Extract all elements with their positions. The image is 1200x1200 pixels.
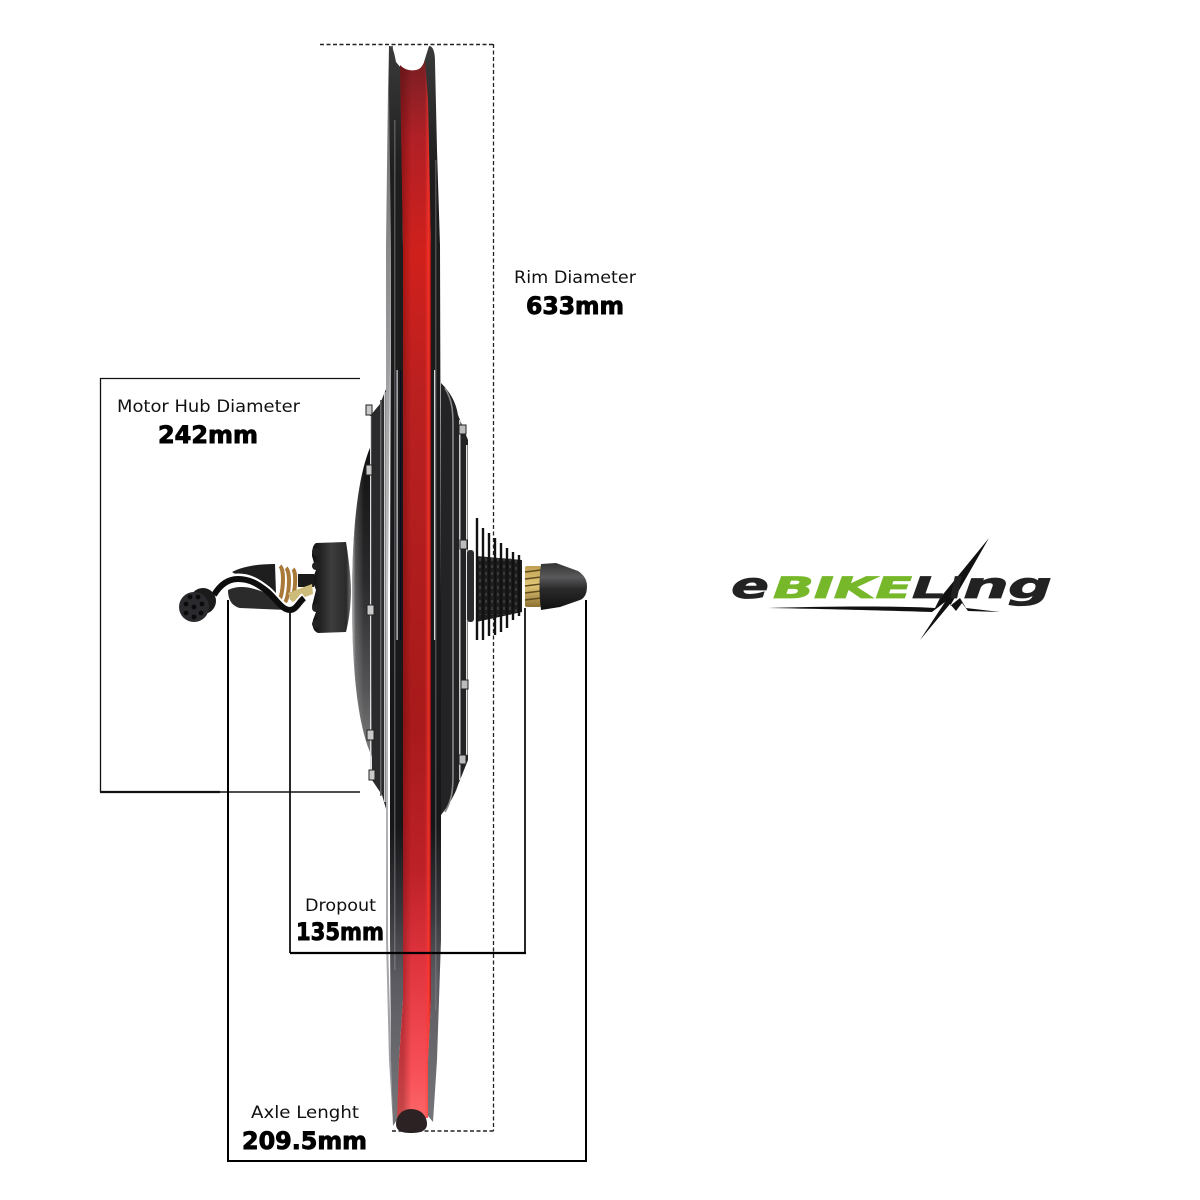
hub: motor dome	[352, 424, 388, 776]
dimension: motor hub diameter	[100, 378, 360, 792]
dimension: dropout	[290, 608, 526, 953]
logo wordmark: I	[950, 571, 962, 605]
wheel photo	[179, 46, 587, 1133]
logo wordmark: BIKE	[773, 571, 912, 605]
logo wordmark: n	[963, 566, 1009, 607]
8-pin connector	[179, 584, 220, 622]
dimension: rim diameter	[320, 44, 636, 1131]
axle nut	[540, 563, 587, 610]
label: dropout: Dropout	[305, 896, 376, 916]
hub: left flange	[366, 384, 388, 816]
label: motor hub diameter: Motor Hub Diameter	[117, 397, 300, 417]
label: rim diameter: Rim Diameter	[514, 268, 636, 288]
rim: red inner channel	[397, 60, 431, 1118]
cable moulding	[214, 564, 304, 610]
rim: outer bands	[386, 46, 441, 1126]
label: axle length: Axle Lenght	[251, 1103, 359, 1123]
hub: right flange	[441, 383, 468, 815]
value: 242mm: 242mm	[158, 421, 258, 449]
logo: ebikeling	[731, 538, 1052, 640]
logo wordmark: e	[731, 566, 769, 607]
left axle end cap	[312, 542, 351, 633]
value: 135mm: 135mm	[296, 918, 384, 946]
logo wordmark: L	[912, 571, 946, 605]
logo wordmark	[731, 566, 1052, 607]
value: 633mm: 633mm	[526, 292, 624, 320]
value: 209.5mm: 209.5mm	[242, 1127, 367, 1155]
dimension: axle length	[228, 600, 586, 1162]
cassette sprockets	[467, 518, 522, 640]
logo underline and lightning bolt	[768, 538, 1000, 640]
axle stub and wire coil	[279, 566, 314, 602]
rim: bottom tyre section	[396, 1109, 427, 1133]
logo wordmark: g	[1008, 566, 1052, 607]
lock-nut coil	[525, 566, 541, 607]
